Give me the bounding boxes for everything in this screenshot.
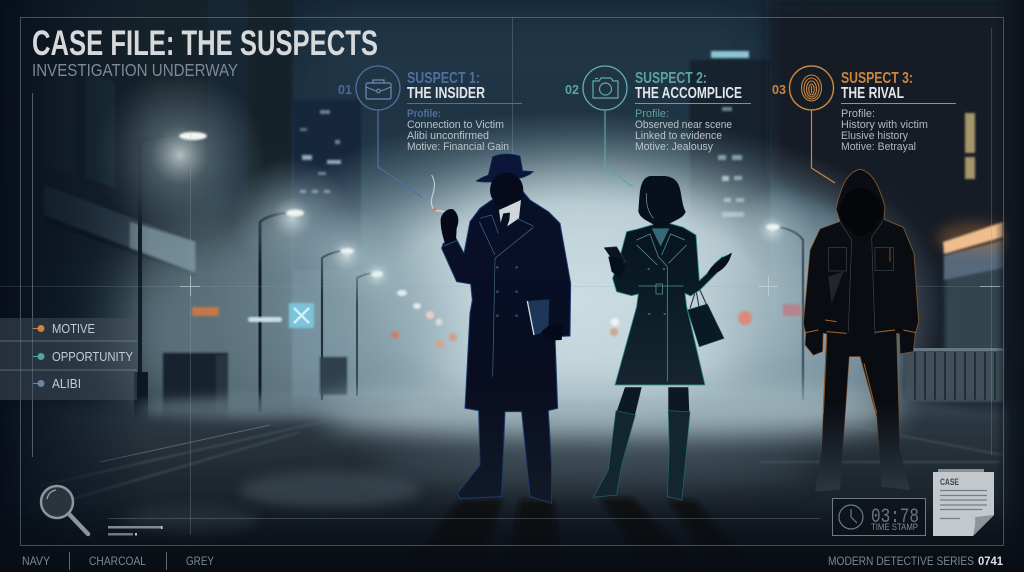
profile suspect 1: Alibi unconfirmed	[407, 130, 489, 142]
heading suspect 1: SUSPECT 1:	[407, 70, 480, 87]
icon: fingerprint	[790, 66, 834, 110]
icon: clock	[839, 505, 863, 529]
heading suspect 3	[841, 70, 913, 102]
heading suspect 2: SUSPECT 2:	[635, 70, 707, 87]
footer: palette labels: CHARCOAL	[89, 554, 146, 568]
profile suspect 3: History with victim	[841, 119, 928, 131]
right building front with fence and neon bar	[905, 222, 1013, 402]
profile suspect 1	[407, 108, 509, 153]
callout: suspect 3	[772, 66, 956, 183]
time stamp	[832, 498, 926, 536]
profile suspect 2: Linked to evidence	[635, 130, 722, 142]
panel: legend	[0, 318, 137, 400]
time value: 03:78	[871, 506, 919, 529]
profile suspect 1: Motive: Financial Gain	[407, 141, 509, 153]
profile suspect 3: Profile:	[841, 108, 875, 120]
title: CASE FILE: THE SUSPECTS	[32, 24, 378, 63]
connector 2	[605, 110, 633, 187]
heading suspect 1: THE INSIDER	[407, 85, 485, 102]
street furniture	[163, 353, 347, 421]
footer: palette labels	[22, 552, 214, 570]
heading suspect 3: THE RIVAL	[841, 85, 904, 102]
legend: opportunity: OPPORTUNITY	[52, 350, 134, 364]
footer: palette labels: GREY	[186, 554, 214, 568]
number 03: 03	[772, 82, 786, 97]
figure shadows	[405, 498, 750, 572]
legend: alibi: ALIBI	[52, 377, 81, 391]
time label: TIME STAMP	[871, 522, 918, 532]
figure: suspect 1 trench-coat man	[431, 154, 571, 503]
legend: motive: MOTIVE	[52, 322, 95, 336]
footer: series label: MODERN DETECTIVE SERIES	[828, 554, 974, 568]
profile suspect 2: Observed near scene	[635, 119, 732, 131]
profile suspect 2: Profile:	[635, 108, 669, 120]
street lamps	[95, 70, 814, 427]
icon: magnifying glass	[41, 486, 88, 534]
road	[0, 382, 1024, 572]
heading suspect 2: THE ACCOMPLICE	[635, 85, 742, 102]
number 02: 02	[565, 82, 579, 97]
profile suspect 1: Profile:	[407, 108, 441, 120]
left building	[0, 0, 292, 430]
progress bars	[108, 526, 162, 536]
icon: camera	[583, 66, 627, 110]
profile suspect 2: Motive: Jealousy	[635, 141, 713, 153]
heading suspect 2	[635, 70, 742, 102]
connector 3	[812, 110, 835, 183]
heading suspect 1	[407, 70, 485, 102]
icon: case document: CASE	[940, 477, 959, 487]
heading suspect 3: SUSPECT 3:	[841, 70, 913, 87]
subtitle: INVESTIGATION UNDERWAY	[32, 60, 238, 80]
profile suspect 3	[841, 108, 928, 153]
footer: series label: 0741	[978, 554, 1003, 568]
figure: suspect 3 hooded man	[803, 169, 919, 492]
profile suspect 1: Connection to Victim	[407, 119, 504, 131]
profile suspect 3: Elusive history	[841, 130, 908, 142]
main fog	[205, 110, 945, 490]
centre towers	[293, 51, 770, 320]
header	[32, 24, 378, 80]
callout: suspect 2	[565, 66, 751, 187]
profile suspect 2	[635, 108, 732, 153]
icon: briefcase	[356, 66, 400, 110]
footer: palette labels: NAVY	[22, 554, 50, 568]
profile suspect 3: Motive: Betrayal	[841, 141, 916, 153]
icon: case document	[933, 469, 994, 536]
figure: suspect 2 woman with phone and bag	[593, 176, 732, 500]
neon signs and distant lights	[192, 303, 801, 348]
callout: suspect 1	[338, 66, 522, 197]
edge vignettes	[0, 0, 150, 572]
connector 1	[378, 110, 422, 197]
number 01: 01	[338, 82, 352, 97]
right building	[770, 0, 1024, 420]
